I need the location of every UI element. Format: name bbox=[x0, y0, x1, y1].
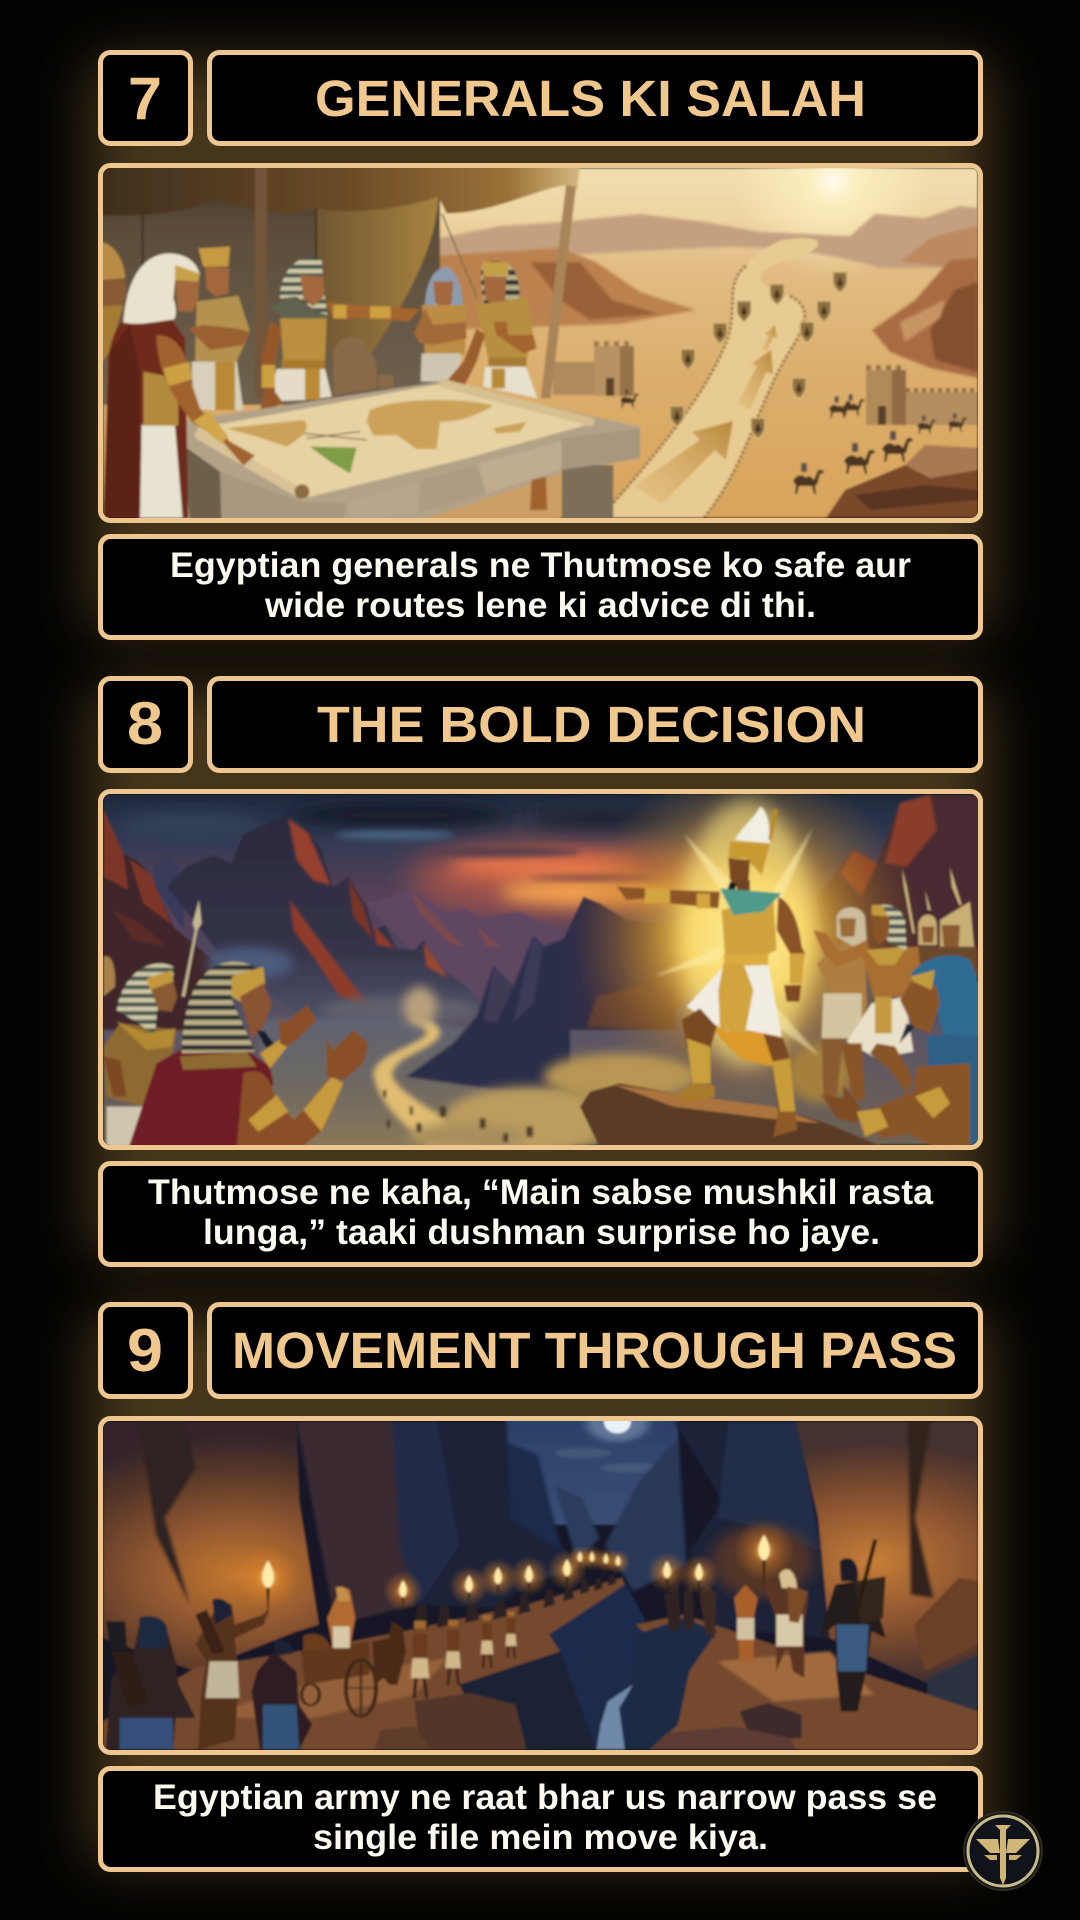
rising dust bbox=[403, 987, 617, 1153]
general gold crown bbox=[188, 247, 250, 410]
parchment map bbox=[197, 383, 592, 499]
heading: the bold decision bbox=[210, 678, 980, 770]
soldier in white headdress bbox=[817, 907, 867, 1097]
marcher silhouettes on right path bbox=[664, 1585, 716, 1638]
clouds and sunset streaks bbox=[120, 803, 710, 914]
left canyon cliff bbox=[430, 248, 696, 330]
desert sky and ground bbox=[103, 168, 978, 518]
distant column of soldiers bbox=[414, 1575, 616, 1631]
archer raising torch bbox=[195, 1599, 268, 1750]
caption bbox=[100, 536, 980, 638]
right red mountains bbox=[817, 795, 980, 977]
tent drape bbox=[317, 197, 438, 365]
great peak bbox=[167, 817, 487, 1030]
heading: generals ki salah bbox=[210, 52, 980, 144]
general right, striped headdress bbox=[443, 261, 537, 398]
pharaoh pointing with outstretched arm bbox=[617, 807, 805, 1137]
distant army bbox=[383, 1090, 533, 1142]
right canyon cliff bbox=[872, 258, 978, 378]
canyon walls and ledges bbox=[103, 1405, 978, 1750]
sun bbox=[742, 168, 924, 266]
back soldiers bbox=[913, 902, 978, 977]
archer with quiver bbox=[106, 1616, 195, 1750]
pots behind the general bbox=[333, 337, 393, 395]
clouds bbox=[555, 1448, 667, 1473]
chasm bbox=[527, 1578, 717, 1750]
big torch left bbox=[236, 1546, 300, 1620]
big torch right bbox=[734, 1521, 794, 1590]
caption bbox=[100, 1768, 980, 1870]
caption: single file mein move kiya. bbox=[313, 1818, 768, 1857]
marching soldiers left bbox=[411, 1612, 516, 1698]
number badge 7: 7 bbox=[128, 65, 162, 132]
general far left bbox=[100, 242, 126, 365]
caption: wide routes lene ki advice di thi. bbox=[264, 586, 816, 625]
number badge 8 bbox=[100, 678, 190, 770]
far cliffs bbox=[504, 1438, 686, 1591]
tent back wall bbox=[103, 196, 442, 406]
caption bbox=[100, 1164, 980, 1264]
far purple range bbox=[367, 890, 570, 1003]
general blue-gray headdress bbox=[414, 267, 467, 382]
rock ledge bbox=[580, 1083, 887, 1148]
backpack soldier right bbox=[818, 1540, 886, 1711]
moon bbox=[587, 1405, 648, 1441]
right fortress bbox=[866, 365, 978, 425]
ambient gold glow: section 9 bbox=[90, 1312, 990, 1862]
spear bbox=[182, 900, 202, 997]
torch light on dark wall bbox=[712, 1525, 813, 1598]
mid wall right bbox=[674, 1421, 830, 1638]
valley mist bbox=[207, 947, 480, 1023]
lower ridge in dust bbox=[587, 987, 677, 1030]
torches left bbox=[383, 1546, 630, 1617]
route arrows bbox=[634, 325, 777, 504]
left red mountain bbox=[103, 810, 217, 1030]
inner body glow bbox=[680, 800, 813, 1067]
right boulders bbox=[914, 1578, 978, 1750]
section 8: the bold decision bbox=[100, 678, 982, 1264]
right ledge bbox=[628, 1615, 978, 1750]
lower plain bbox=[260, 1017, 570, 1153]
heading: movement through pass: MOVEMENT THROUGH PASS bbox=[232, 1322, 957, 1379]
illustration panel: pharaoh on the cliff bbox=[100, 763, 982, 1153]
number badge 8: 8 bbox=[127, 690, 163, 757]
supply cart bbox=[301, 1634, 376, 1716]
stone table bbox=[177, 382, 640, 521]
torch bearer right bbox=[762, 1569, 808, 1678]
number badge 9: 9 bbox=[127, 1317, 163, 1384]
caption: Thutmose ne kaha, “Main sabse mushkil rasta bbox=[148, 1173, 934, 1212]
road walls bbox=[600, 266, 805, 518]
winding road bbox=[600, 238, 818, 518]
heading: generals ki salah: GENERALS KI SALAH bbox=[315, 70, 866, 127]
back ridge bbox=[154, 863, 186, 928]
orange-lit right wall bbox=[796, 1421, 978, 1685]
left fortress bbox=[553, 341, 634, 396]
general pointing, striped headdress bbox=[259, 257, 420, 413]
archer in blue kilt bbox=[252, 1640, 312, 1750]
section 7: generals ki salah bbox=[100, 52, 980, 638]
dusk sky bbox=[103, 794, 978, 1145]
canopy bbox=[100, 165, 580, 216]
left ledge bbox=[103, 1578, 625, 1750]
spears of soldiers bbox=[902, 867, 962, 933]
golden radiance bbox=[573, 763, 920, 1110]
soldier with striped headdress bbox=[103, 956, 177, 1147]
illustration panel: generals planning in desert tent bbox=[98, 163, 983, 523]
icon: winged sword medallion bbox=[964, 1812, 1042, 1890]
light rays bbox=[653, 827, 820, 1057]
route shields bbox=[670, 272, 847, 439]
pharaoh, ledge and soldiers, right half bbox=[543, 763, 982, 1148]
caption: lunga,” taaki dushman surprise ho jaye. bbox=[203, 1213, 880, 1252]
courtier with red cape bbox=[128, 962, 368, 1148]
torches right bbox=[647, 1552, 719, 1600]
right crevice bbox=[908, 1421, 933, 1598]
caption: Egyptian generals ne Thutmose ko safe aur bbox=[170, 546, 911, 585]
blue headdress courtier bbox=[822, 955, 982, 1148]
mountains and valley, left half bbox=[103, 810, 617, 1153]
ambient gold glow: section 8 bbox=[90, 686, 990, 1256]
night base bbox=[103, 1421, 978, 1750]
driver on cart bbox=[327, 1586, 355, 1648]
tent poles and ropes bbox=[142, 165, 576, 398]
caption: Egyptian army ne raat bhar us narrow pass se bbox=[153, 1778, 937, 1817]
tent, generals and map table bbox=[100, 165, 640, 521]
ambient gold glow: section 7 bbox=[90, 60, 990, 630]
general with white headcloth and red cape bbox=[103, 253, 255, 518]
number badge 7 bbox=[100, 52, 190, 144]
night sky bbox=[504, 1418, 678, 1525]
illustration panel: night march through canyon bbox=[100, 1405, 980, 1752]
mid wall left bbox=[296, 1421, 571, 1625]
dust trail bbox=[373, 1017, 487, 1148]
number badge 9 bbox=[100, 1304, 190, 1396]
section 9: movement through pass bbox=[100, 1304, 980, 1870]
soldier pointing back, stripes bbox=[813, 905, 920, 1100]
dust below cliff bbox=[543, 1043, 853, 1103]
distant mesas bbox=[430, 206, 978, 270]
camel caravan bbox=[620, 389, 967, 494]
ox with barrel bbox=[372, 1621, 406, 1685]
rock cracks left bbox=[139, 1421, 195, 1605]
heading: the bold decision: THE BOLD DECISION bbox=[317, 696, 866, 753]
heading: movement through pass bbox=[210, 1304, 980, 1396]
foreground rock bbox=[826, 445, 978, 518]
cliff with dark flank bbox=[547, 897, 700, 1030]
soldier orange right bbox=[734, 1585, 758, 1661]
orange-lit left wall bbox=[103, 1421, 319, 1671]
right dark peak bbox=[407, 937, 570, 1090]
